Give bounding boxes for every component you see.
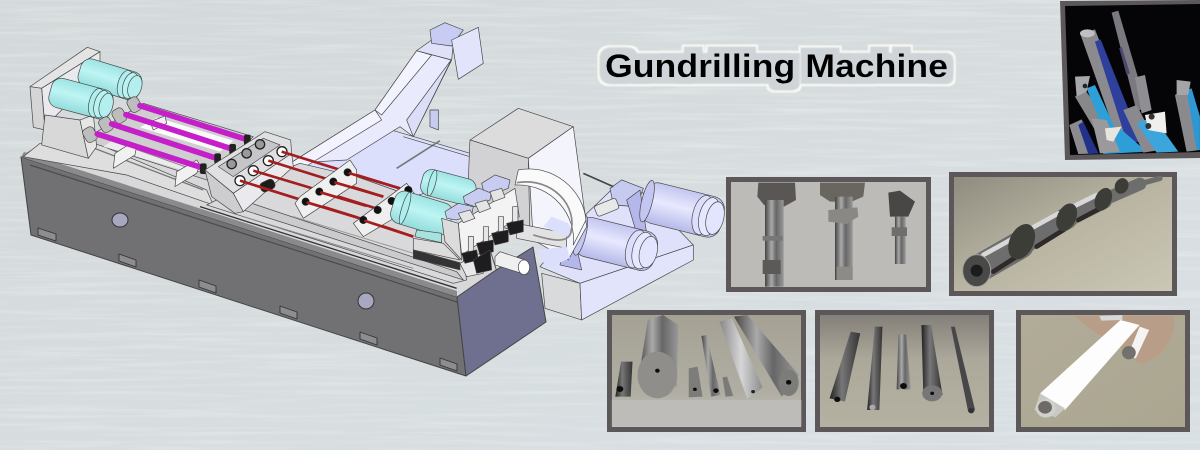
camshaft body <box>977 178 1160 270</box>
shaft one <box>757 183 796 207</box>
motor: rear lavender <box>637 179 729 241</box>
photo: gear shafts <box>726 177 931 292</box>
motor: front cyan <box>47 76 116 122</box>
thin tool <box>1112 11 1147 112</box>
main bed: upper slab <box>21 125 497 297</box>
photo: camshaft <box>949 172 1177 296</box>
cam lobes <box>1003 176 1131 264</box>
white valve pins <box>468 207 518 252</box>
spindle couplings <box>81 95 143 144</box>
magenta spindle rods <box>97 106 244 168</box>
right tool <box>1175 88 1200 152</box>
black valve row <box>462 220 523 273</box>
right tail base and lavender motors <box>540 173 729 320</box>
black coupling <box>259 178 276 193</box>
main housing and ring band <box>467 108 587 268</box>
coiled hose band <box>515 169 586 245</box>
motor: rear cyan right <box>418 167 478 207</box>
main bed: front face <box>21 152 466 376</box>
left tool <box>1075 90 1115 138</box>
whip guide two <box>353 183 417 237</box>
gundrilling machine CAD drawing <box>21 23 729 376</box>
shaft two <box>820 183 865 202</box>
dark rod collars <box>200 135 251 174</box>
chip conveyor <box>290 23 483 197</box>
lower left tool <box>1069 119 1098 154</box>
feed head with cyan motors <box>388 167 530 277</box>
service holes <box>112 213 374 309</box>
left rail bed with magenta rods <box>23 47 253 205</box>
photo: gun drill tools <box>1060 0 1200 160</box>
top valves <box>445 175 510 223</box>
rear plate <box>30 47 100 88</box>
photo: deep hole tubes <box>815 310 994 432</box>
shaft shadow <box>993 207 1103 272</box>
whip guide one <box>295 160 357 218</box>
motor stand <box>42 115 88 158</box>
red drill rods <box>240 152 413 237</box>
title: Gundrilling Machine <box>605 48 948 84</box>
small tool <box>1135 75 1152 113</box>
feed bar <box>517 223 567 248</box>
end plate <box>458 188 519 255</box>
mounting pockets <box>38 228 457 371</box>
red drill section <box>200 132 467 288</box>
shaft three <box>888 191 915 217</box>
large tool <box>1081 29 1133 137</box>
shaft highlight <box>983 195 1097 255</box>
main bed: right end face <box>457 247 546 376</box>
motor: front cyan right <box>388 189 455 238</box>
photo: bright tube in hand <box>1016 310 1190 432</box>
hex spindle end <box>495 252 525 273</box>
motor: front lavender <box>570 214 662 274</box>
centre wedge tools <box>1097 123 1147 154</box>
drill guide block <box>205 132 292 193</box>
photo: drilled bars <box>607 310 806 432</box>
motor: rear cyan <box>76 56 145 103</box>
support brackets <box>113 116 200 187</box>
